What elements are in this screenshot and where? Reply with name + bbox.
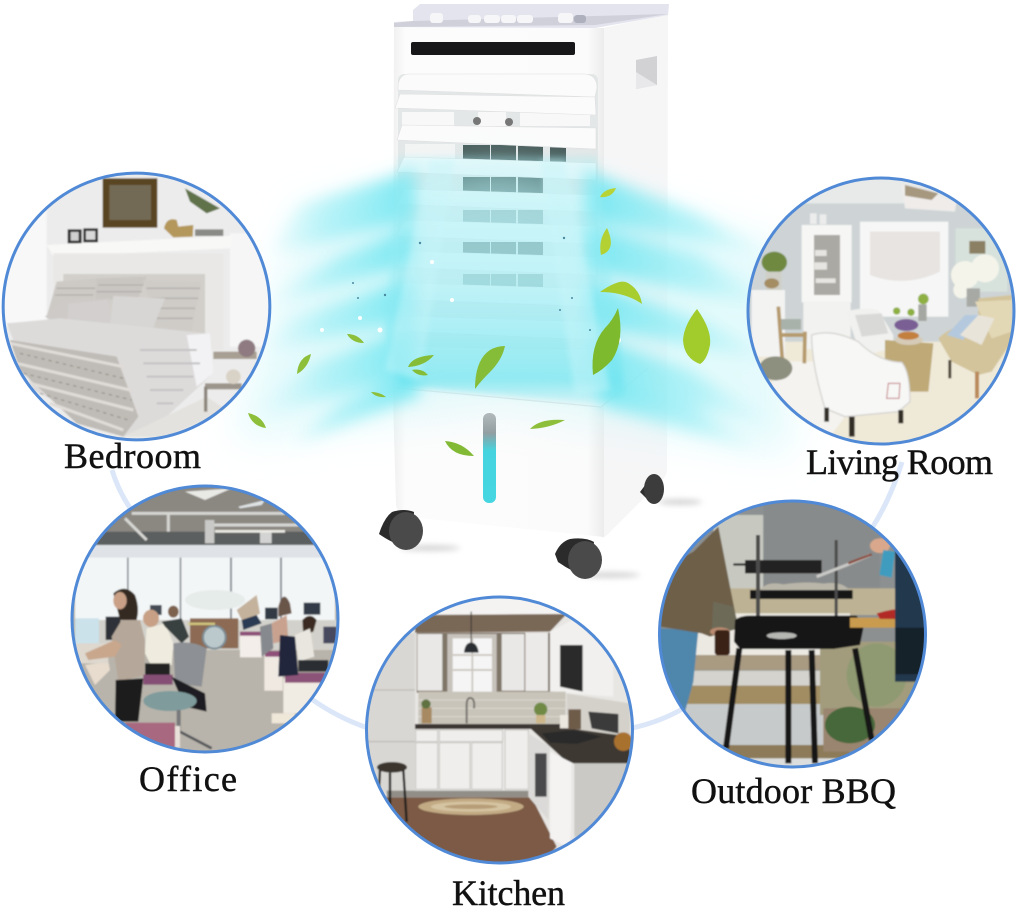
louver recess and interior <box>398 74 598 350</box>
connector ring between scenes <box>112 462 902 728</box>
bedroom scene <box>0 170 273 443</box>
lower body band <box>393 346 650 407</box>
office ring <box>72 486 338 752</box>
panel: outdoor BBQ photo <box>650 495 937 775</box>
bedroom ring <box>3 173 270 440</box>
louver slats <box>395 74 597 340</box>
mist on the louvers <box>385 156 625 404</box>
floating leaves <box>248 188 710 456</box>
label: Outdoor BBQ: Outdoor BBQ <box>691 771 896 811</box>
office scene <box>74 488 336 750</box>
water droplets <box>352 237 591 331</box>
broad air fan <box>235 170 790 455</box>
kitchen ring <box>366 597 632 863</box>
front face <box>393 27 604 537</box>
water level gauge <box>483 413 496 503</box>
outdoor BBQ scene <box>661 502 924 766</box>
panel: office photo <box>65 480 345 760</box>
outdoor BBQ ring <box>659 501 925 767</box>
panel: living room photo <box>745 175 1018 448</box>
panel: bedroom photo <box>0 170 273 443</box>
label: Bedroom: Bedroom <box>64 436 201 476</box>
air cooler product <box>379 4 702 579</box>
panel: kitchen photo <box>360 590 640 870</box>
cold air mist <box>235 156 790 455</box>
air rays left <box>245 170 420 445</box>
top control panel <box>394 4 669 28</box>
living room ring <box>748 178 1014 444</box>
central light streaks <box>385 160 610 395</box>
display strip <box>411 42 575 55</box>
side handle recess <box>636 56 657 89</box>
caster: rear right <box>640 474 664 504</box>
caster: front left <box>379 510 423 550</box>
floor shadows <box>400 499 702 578</box>
living room scene <box>745 175 1018 448</box>
water tank seam <box>397 368 648 407</box>
side face <box>602 14 668 538</box>
air rays right <box>585 170 790 450</box>
label: Office: Office <box>139 759 237 799</box>
sparkles and droplets <box>320 260 621 343</box>
caster: front right <box>555 538 602 579</box>
kitchen scene <box>368 598 631 862</box>
label: Living Room: Living Room <box>806 442 993 482</box>
